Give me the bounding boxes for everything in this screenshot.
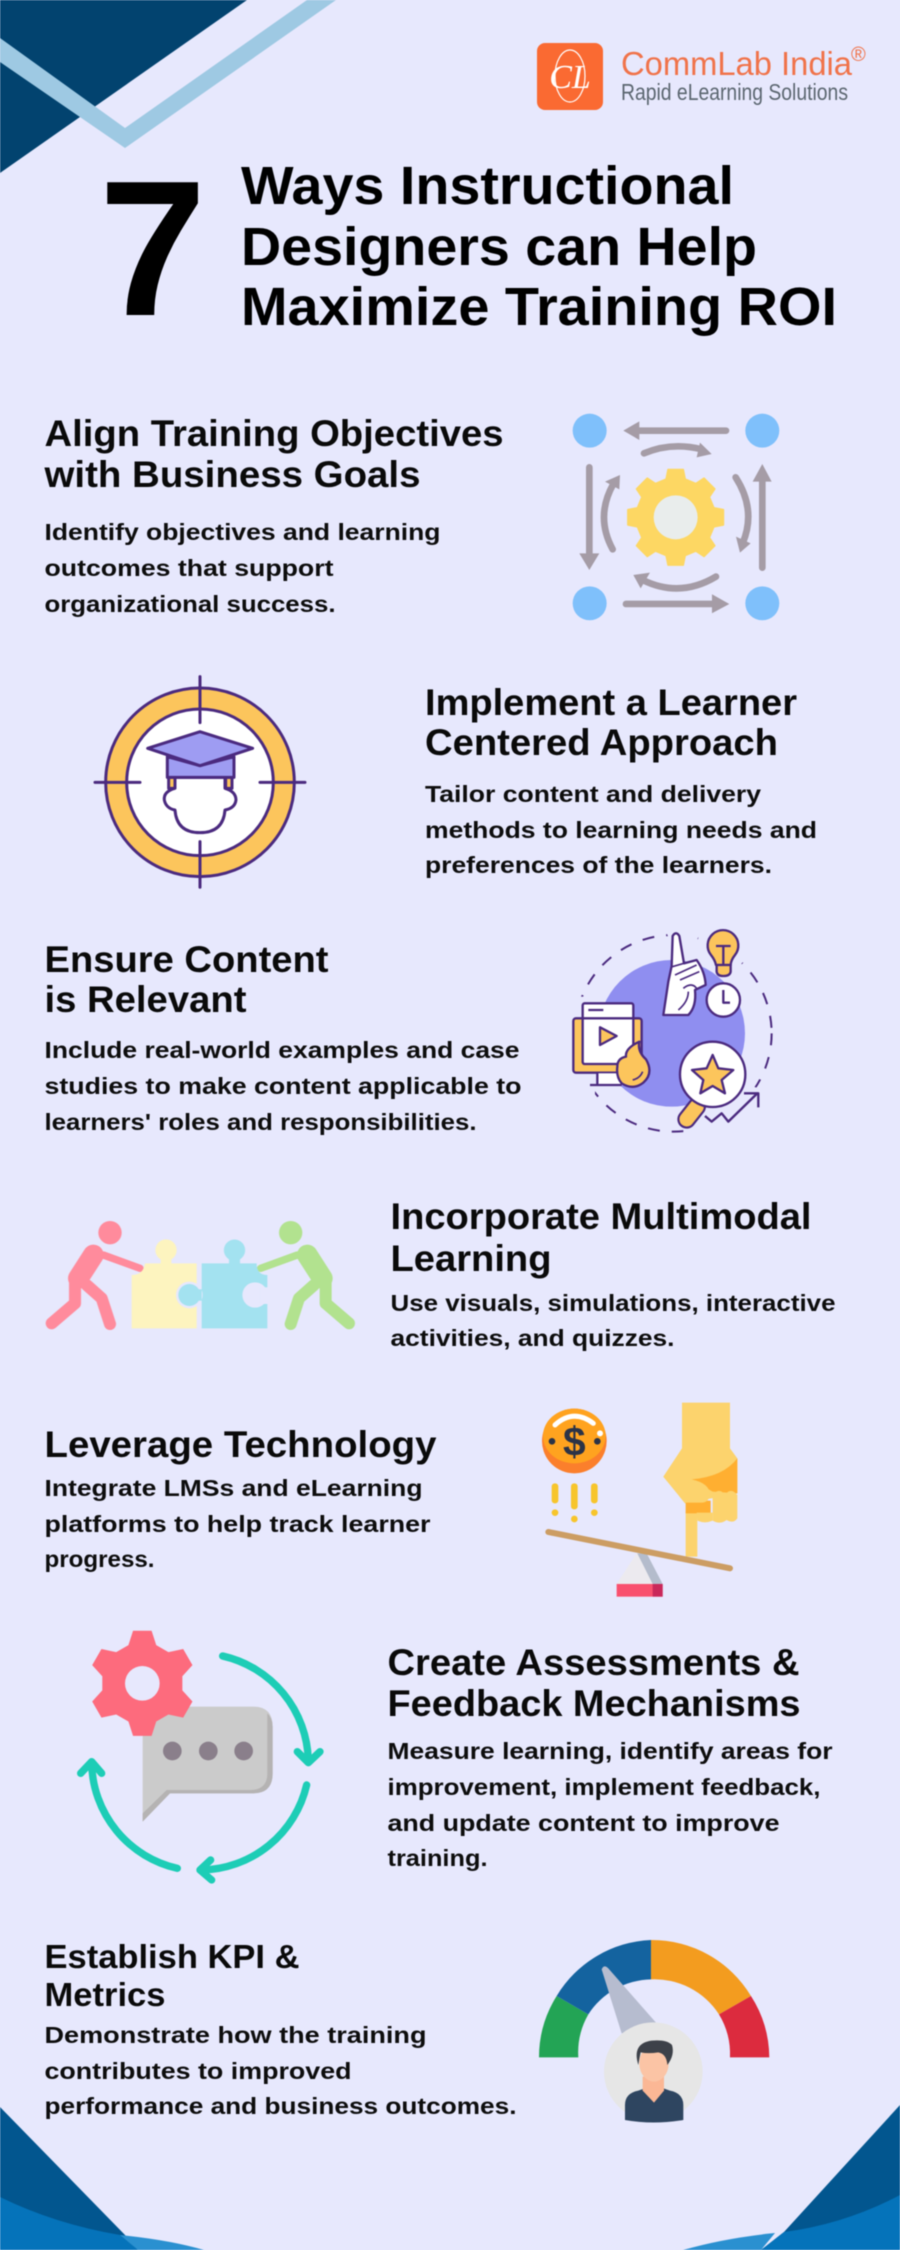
title — [241, 156, 837, 337]
heading 6 — [388, 1642, 800, 1724]
heading 1 — [43, 413, 504, 495]
heading 3: Ensure Content — [44, 939, 328, 980]
logo: CommLab India: ® — [851, 44, 866, 66]
heading 5: Leverage Technology — [44, 1424, 437, 1465]
heading 7: Metrics — [44, 1976, 166, 2013]
icon: gauge with person — [539, 1940, 769, 2122]
heading 1: with Business Goals — [43, 454, 420, 495]
body 3 — [44, 1037, 522, 1135]
section 5: technology — [44, 1403, 737, 1597]
body 1 — [44, 519, 440, 617]
body 5: platforms to help track learner — [44, 1511, 430, 1537]
heading 2: Centered Approach — [425, 722, 778, 763]
bottom corner decorations — [0, 2105, 900, 2250]
heading 4: Incorporate Multimodal — [390, 1196, 812, 1237]
body 1: Identify objectives and learning — [44, 519, 440, 545]
body 6: Measure learning, identify areas for — [388, 1738, 832, 1764]
body 4 — [390, 1290, 836, 1351]
body 5 — [44, 1475, 430, 1572]
heading 2: Implement a Learner — [425, 682, 797, 723]
heading 4: Learning — [390, 1238, 552, 1279]
body 6: training. — [388, 1845, 488, 1871]
body 6 — [388, 1738, 832, 1871]
body 4: Use visuals, simulations, interactive — [390, 1290, 836, 1316]
body 1: outcomes that support — [44, 555, 334, 581]
top-left corner decoration — [0, 0, 336, 173]
icon: target with graduate — [95, 677, 305, 887]
heading 6: Create Assessments & — [388, 1642, 800, 1683]
heading 3: is Relevant — [44, 979, 247, 1020]
section 2: learner centered — [95, 677, 817, 887]
body 1: organizational success. — [44, 591, 336, 617]
heading 4 — [390, 1196, 812, 1279]
body 3: studies to make content applicable to — [44, 1073, 522, 1099]
body 7: performance and business outcomes. — [44, 2093, 516, 2119]
heading 6: Feedback Mechanisms — [388, 1683, 800, 1724]
body 4: activities, and quizzes. — [390, 1325, 674, 1351]
logo: CommLab India — [537, 43, 866, 110]
icon: feedback loop — [81, 1631, 320, 1880]
section 7: KPI and metrics — [44, 1938, 769, 2122]
icon: gear with arrows — [573, 414, 779, 620]
title: Maximize Training ROI — [241, 277, 837, 337]
section 3: relevant content — [44, 913, 772, 1140]
section 6: assessments — [81, 1631, 832, 1880]
heading 2 — [425, 682, 797, 763]
heading 3 — [44, 939, 328, 1020]
body 2 — [425, 781, 817, 878]
heading 1: Align Training Objectives — [44, 413, 504, 454]
title numeral 7: 7 — [99, 140, 206, 356]
icon: relevant content — [568, 913, 772, 1140]
icon: coin and seesaw — [542, 1403, 737, 1597]
section 1: align objectives — [43, 413, 779, 620]
icon: figures joining puzzle — [52, 1221, 349, 1328]
title: Ways Instructional — [241, 156, 734, 216]
body 2: methods to learning needs and — [425, 817, 817, 843]
body 6: and update content to improve — [388, 1810, 780, 1836]
heading 7 — [44, 1938, 300, 2013]
title: Designers can Help — [241, 217, 757, 277]
body 7: contributes to improved — [44, 2058, 352, 2084]
body 2: Tailor content and delivery — [425, 781, 761, 807]
body 3: Include real-world examples and case — [44, 1037, 520, 1063]
body 7: Demonstrate how the training — [44, 2022, 426, 2048]
icon: coin and seesaw: $ — [563, 1419, 586, 1465]
heading 7: Establish KPI & — [44, 1938, 300, 1975]
body 6: improvement, implement feedback, — [388, 1774, 820, 1800]
body 5: progress. — [44, 1546, 154, 1572]
logo: CommLab India: CL — [549, 59, 591, 96]
logo: CommLab India: Rapid eLearning Solutions — [621, 79, 848, 105]
body 5: Integrate LMSs and eLearning — [44, 1475, 422, 1501]
logo: CommLab India: CommLab India — [621, 45, 853, 82]
section 4: multimodal — [52, 1196, 836, 1351]
body 2: preferences of the learners. — [425, 852, 772, 878]
body 7 — [44, 2022, 516, 2119]
body 3: learners' roles and responsibilities. — [44, 1109, 477, 1135]
